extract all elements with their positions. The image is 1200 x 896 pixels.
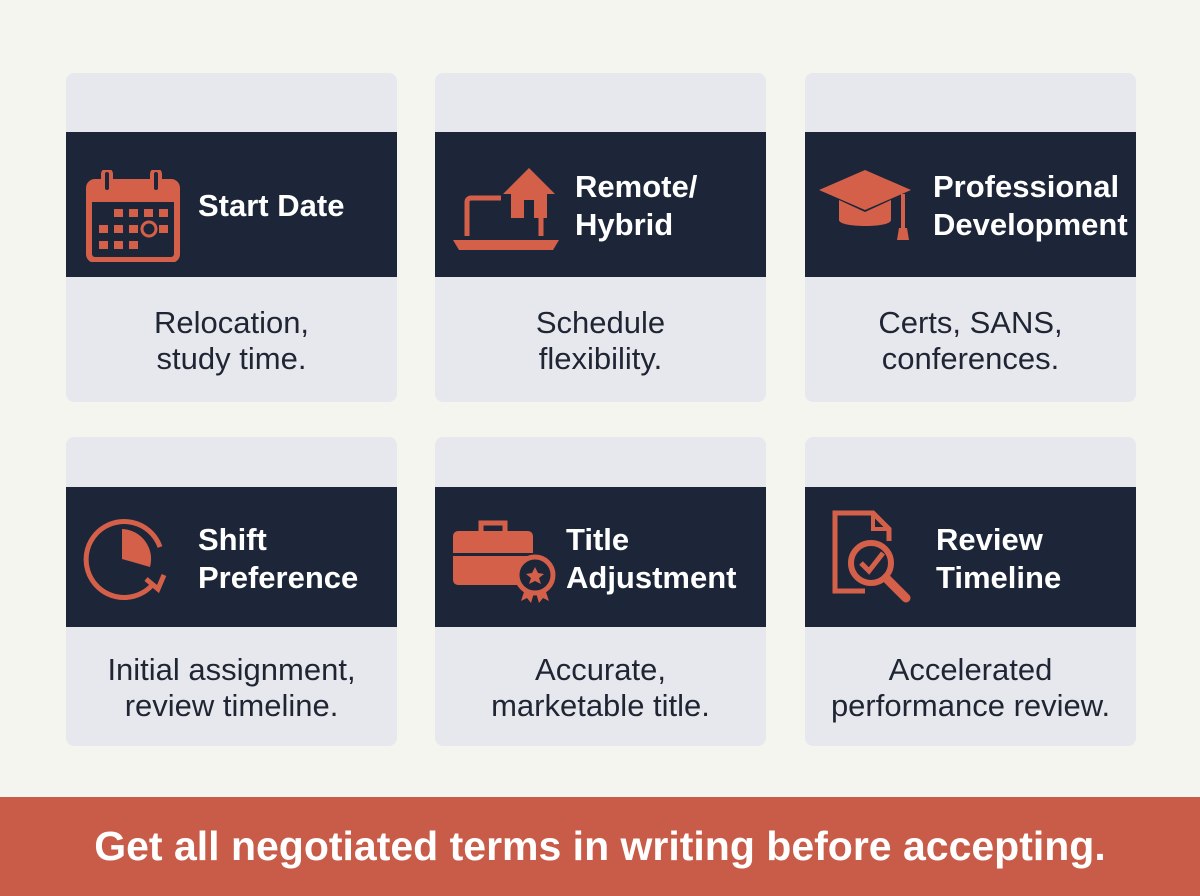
panel: review timeline [805,437,1136,746]
title: Professional [933,169,1119,204]
title [936,522,1061,595]
title: Review [936,522,1043,557]
body text: Schedule [536,305,665,340]
body text [878,305,1063,376]
body text: Accurate, [535,652,666,687]
icon: briefcase with badge [453,520,556,603]
body text: performance review. [831,688,1110,723]
icon: document with magnifier [832,510,910,602]
body text: marketable title. [491,688,710,723]
title: Hybrid [575,207,673,242]
title: Shift [198,522,267,557]
panel: title adjustment [435,437,766,746]
body text: review timeline. [125,688,338,723]
body text [491,652,710,723]
title: Adjustment [566,560,736,595]
body text [831,652,1110,723]
title: Development [933,207,1128,242]
title: Timeline [936,560,1061,595]
panel: start date [66,73,397,402]
icon: graduation cap [819,170,911,240]
footer banner: Get all negotiated terms in writing before accepting. [94,823,1106,869]
title: Preference [198,560,358,595]
title: Remote/ [575,169,697,204]
body text [107,652,356,723]
title [575,169,698,242]
body text: Relocation, [154,305,309,340]
panel: shift preference [66,437,397,746]
body text: conferences. [882,341,1059,376]
body text: Initial assignment, [107,652,356,687]
footer banner [0,797,1200,896]
icon: clock cycle [84,519,166,600]
body text [536,305,665,376]
title [566,522,736,595]
header band [66,132,397,277]
icon: calendar [86,170,180,262]
body text: Certs, SANS, [878,305,1063,340]
body text [154,305,309,376]
body text: study time. [157,341,306,376]
panel: professional development [805,73,1136,402]
title: Start Date [198,188,344,223]
body text: flexibility. [539,341,662,376]
title: Title [566,522,629,557]
title [933,169,1128,242]
icon: laptop with house [453,168,559,250]
panel: remote/hybrid [435,73,766,402]
title [198,522,358,595]
body text: Accelerated [889,652,1052,687]
